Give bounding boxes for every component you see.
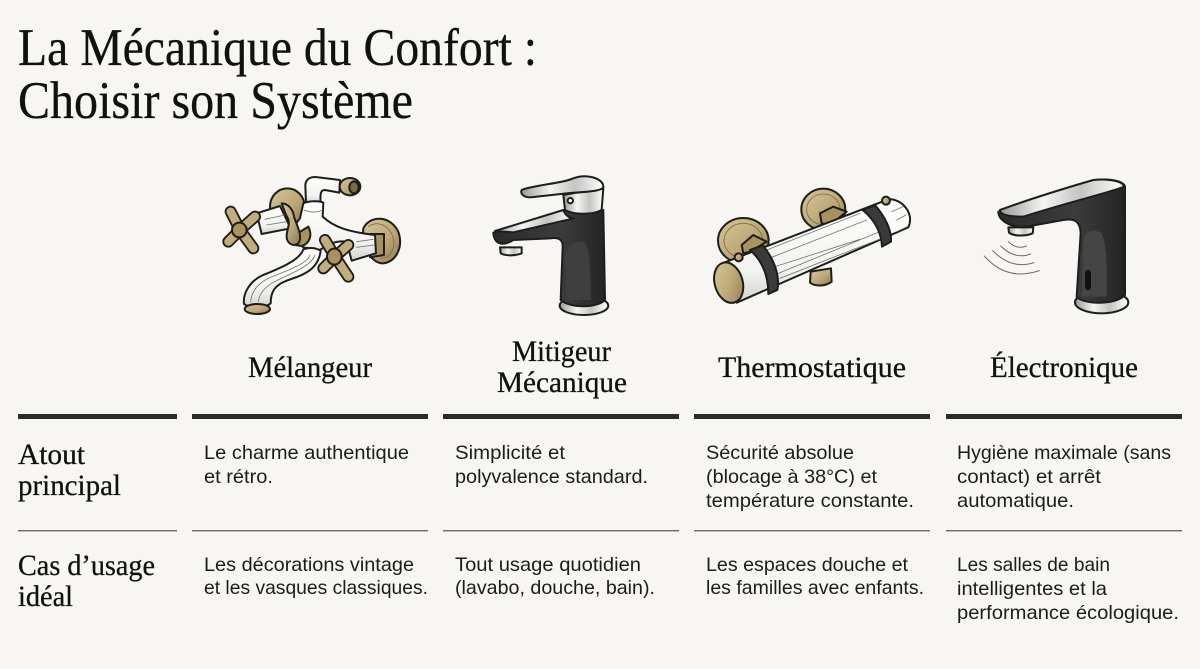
column heading: Mélangeur: Mélangeur <box>248 351 372 384</box>
text: Électronique usage: performance écologique. <box>957 602 1179 624</box>
column heading: Mitigeur Mécanique: Mécanique <box>497 366 627 399</box>
text: Mitigeur atout: Simplicité et <box>455 442 566 464</box>
column heading: Électronique: Électronique <box>990 351 1138 384</box>
text: Électronique atout <box>957 442 1171 512</box>
text: Électronique atout: contact) et arrêt <box>957 466 1102 488</box>
column heading: Mitigeur Mécanique: Mitigeur <box>512 335 611 368</box>
text: Mélangeur usage <box>204 554 428 599</box>
icon: mitigeur mécanique faucet <box>493 176 608 315</box>
text: Thermostatique atout: température constante. <box>706 490 914 512</box>
text: Thermostatique atout: Sécurité absolue <box>706 442 854 464</box>
text: Mitigeur usage: (lavabo, douche, bain). <box>455 577 655 599</box>
column heading: Thermostatique: Thermostatique <box>718 351 906 384</box>
text: Mitigeur usage: Tout usage quotidien <box>455 554 641 576</box>
row label: Atout principal: principal <box>18 469 121 502</box>
text: Électronique usage: Les salles de bain <box>957 554 1110 576</box>
row label: Cas d'usage idéal: idéal <box>18 580 73 613</box>
text: Mitigeur usage <box>455 554 655 599</box>
text: Thermostatique usage <box>706 554 924 599</box>
title: La Mécanique du Confort : <box>18 19 537 77</box>
text: Thermostatique atout <box>706 442 914 512</box>
icon: électronique sensor faucet <box>984 180 1128 313</box>
column heading: Mitigeur Mécanique <box>497 335 627 399</box>
text: Mélangeur usage: Les décorations vintage <box>204 554 414 576</box>
text: Mitigeur atout: polyvalence standard. <box>455 466 648 488</box>
row label: Cas d'usage idéal <box>18 549 155 613</box>
text: Électronique atout: Hygiène maximale (sans <box>957 442 1171 464</box>
text: Électronique atout: automatique. <box>957 490 1074 512</box>
text: Mélangeur atout <box>204 442 409 488</box>
text: Mélangeur usage: et les vasques classiques. <box>204 577 428 599</box>
title: Choisir son Système <box>18 72 413 130</box>
row label: Atout principal: Atout <box>18 438 86 471</box>
text: Mélangeur atout: et rétro. <box>204 466 273 488</box>
icon: thermostatique valve <box>710 189 910 306</box>
text: Thermostatique atout: (blocage à 38°C) et <box>706 466 878 488</box>
text: Électronique usage: intelligentes et la <box>957 578 1107 600</box>
row label: Atout principal <box>18 438 121 502</box>
text: Électronique usage <box>957 554 1179 624</box>
title <box>18 19 537 130</box>
text: Thermostatique usage: les familles avec enfants. <box>706 577 924 599</box>
text: Thermostatique usage: Les espaces douche et <box>706 554 909 576</box>
row label: Cas d'usage idéal: Cas d’usage <box>18 549 155 582</box>
icon: mélangeur faucet <box>228 177 400 314</box>
text: Mélangeur atout: Le charme authentique <box>204 442 409 464</box>
text: Mitigeur atout <box>455 442 648 488</box>
